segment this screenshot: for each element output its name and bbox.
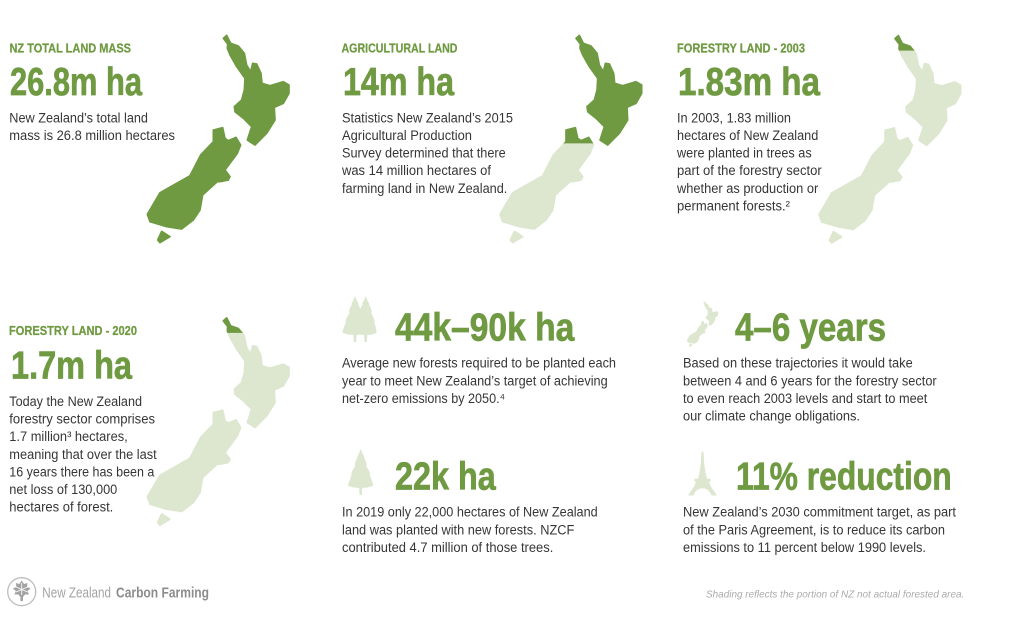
panel: planted in 2019 [342,449,598,555]
text block: agricultural land description: Statistics New Zealand’s 2015 [342,110,513,125]
map: NZ with 2020 forestry share shaded [147,318,289,525]
text block: forestry 2020 description: net loss of 130,000 [9,482,117,497]
map: NZ with 2003 forestry share shaded [819,36,961,243]
map: all of NZ shaded [147,35,289,243]
text block: Paris commitment description: of the Paris Agreement, is to reduce its carbon [683,522,945,537]
text block: forestry 2020 description [9,394,157,515]
text block: new forests description [342,356,616,406]
text block: forestry 2020 description: meaning that over the last [9,447,157,462]
icon: Eiffel tower [688,452,717,496]
icon: single tree [348,449,373,495]
figure: 44k–90k ha: 44k–90k ha [395,307,575,350]
text block: total land mass description [9,110,175,143]
text block: total land mass description: mass is 26.8 million hectares [9,128,175,143]
text block: forestry 2003 description [676,110,822,213]
text block: agricultural land description: farming land in New Zealand. [342,181,507,196]
text block: forestry 2003 description: In 2003, 1.83 million [677,110,791,125]
text block: trajectory description [683,356,937,424]
panel: forestry land 2020 [9,318,289,525]
panel: Paris commitment [683,452,956,555]
text block: forestry 2003 description: whether as production or [676,181,819,196]
panel: years to recover [683,302,937,424]
figure: 1.83m ha: 1.83m ha [678,61,821,104]
text block: forestry 2020 description: 1.7 million³ hectares, [9,429,128,444]
panel: NZ total land mass [9,35,289,243]
figure: 14m ha: 14m ha [343,61,454,104]
text block: agricultural land description: Agricultural Production [342,128,472,143]
text block: total land mass description: New Zealand’s total land [9,110,148,125]
text block: forestry 2020 description: forestry sector comprises [9,412,155,427]
figure: 11% reduction: 11% reduction [736,455,952,498]
text block: forestry 2003 description: hectares of New Zealand [677,128,818,143]
text block: forestry 2020 description: Today the New Zealand [9,394,142,409]
panel: new forests required [342,296,616,406]
text block: new forests description: Average new forests required to be planted each [342,356,616,371]
footnote: shading note: Shading reflects the portion of NZ not actual forested area. [706,589,964,601]
text block: 2019 planting description: contributed 4.7 million of those trees. [342,540,553,555]
figure: 4–6 years: 4–6 years [735,307,886,350]
wordmark: Carbon Farming [116,584,209,602]
text block: 2019 planting description: land was planted with new forests. NZCF [342,522,574,537]
text block: forestry 2003 description: permanent forests.² [677,198,791,213]
text block: trajectory description: to even reach 2003 levels and start to meet [683,391,928,406]
heading: NZ total land mass: NZ TOTAL LAND MASS [10,41,131,56]
text block: trajectory description: Based on these trajectories it would take [683,356,913,371]
figure: 1.7m ha: 1.7m ha [11,344,132,387]
text block: trajectory description: between 4 and 6 years for the forestry sector [683,373,937,388]
map: NZ with agricultural share shaded [500,35,642,243]
text block: 2019 planting description [342,505,598,555]
heading: forestry land 2020: FORESTRY LAND - 2020 [9,323,137,338]
heading: agricultural land: AGRICULTURAL LAND [342,41,458,56]
icon: two trees [342,296,377,342]
text block: forestry 2003 description: were planted in trees as [676,146,812,161]
heading: forestry land 2003: FORESTRY LAND - 2003 [677,41,805,56]
text block: new forests description: net-zero emissions by 2050.⁴ [342,391,505,406]
figure: 26.8m ha: 26.8m ha [10,61,142,104]
panel: agricultural land [341,35,642,243]
wordmark: New Zealand [42,584,111,602]
text block: forestry 2003 description: part of the forestry sector [677,163,822,178]
wordmark [42,584,209,602]
text block: 2019 planting description: In 2019 only 22,000 hectares of New Zealand [342,505,598,520]
text block: trajectory description: our climate change obligations. [683,408,860,424]
icon: logo tree in circle [8,578,36,606]
text block: agricultural land description [341,110,513,196]
icon: small NZ map [687,302,718,346]
panel: forestry land 2003 [676,36,961,243]
logo: New Zealand Carbon Farming [8,578,209,606]
text block: agricultural land description: was 14 million hectares of [341,163,491,178]
text block: forestry 2020 description: hectares of forest. [9,500,113,515]
text block: new forests description: year to meet New Zealand’s target of achieving [342,373,608,388]
text block: forestry 2020 description: 16 years there has been a [9,464,155,479]
text block: Paris commitment description [683,505,956,555]
text block: Paris commitment description: New Zealand’s 2030 commitment target, as part [683,505,956,520]
figure: 22k ha: 22k ha [395,455,496,498]
text block: Paris commitment description: emissions to 11 percent below 1990 levels. [683,540,926,555]
text block: agricultural land description: Survey determined that there [342,146,506,161]
